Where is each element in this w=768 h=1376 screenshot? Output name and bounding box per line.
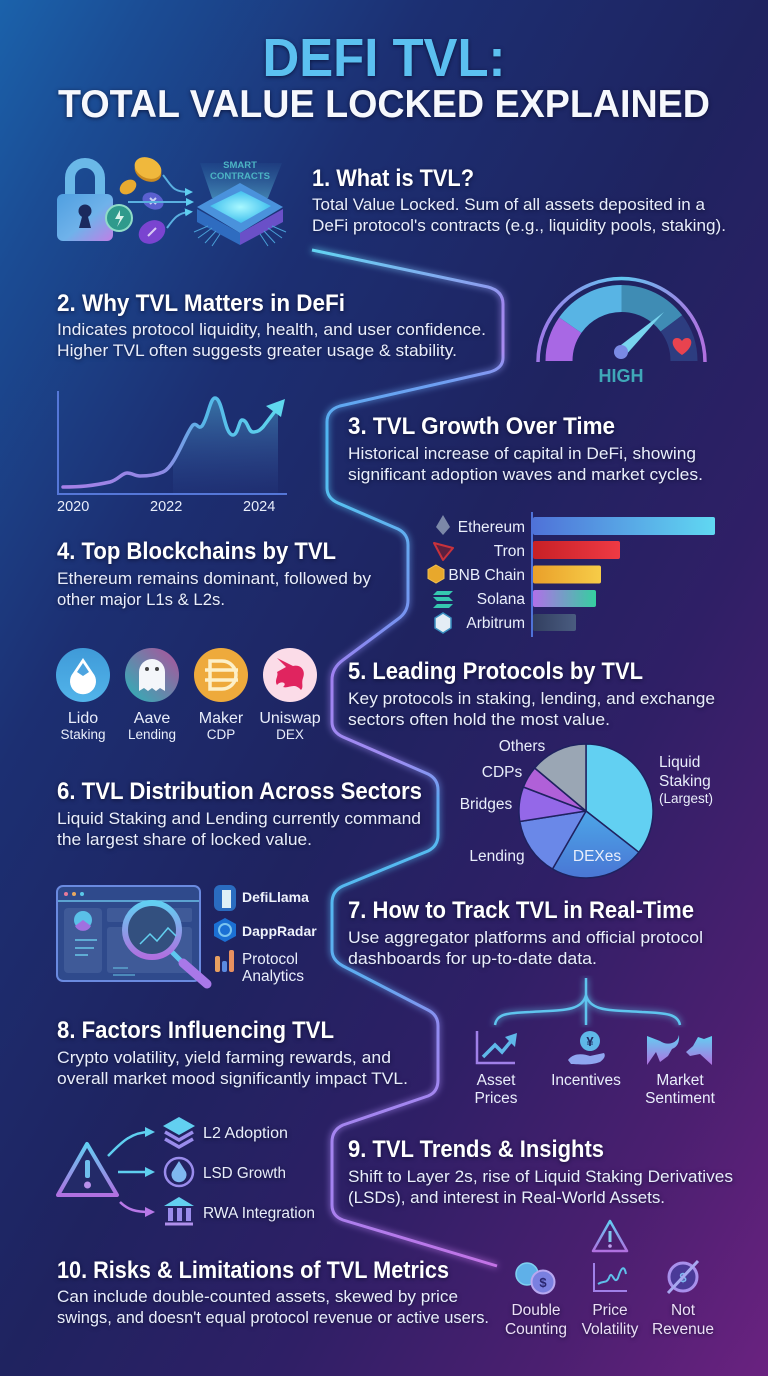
section 1 text: DeFi protocol's contracts (e.g., liquidity pools, staking). — [312, 217, 726, 235]
platform logos — [214, 885, 317, 985]
section 8 text: Crypto volatility, yield farming rewards, and — [57, 1049, 391, 1067]
pie labels: Others — [499, 738, 546, 755]
title: TOTAL VALUE LOCKED EXPLAINED — [58, 83, 710, 126]
bar labels: Tron — [494, 543, 525, 560]
icon: Lido — [56, 648, 110, 742]
icon: chip: CONTRACTS — [210, 171, 270, 182]
factor labels: Sentiment — [645, 1090, 716, 1107]
section 8 text — [57, 1017, 408, 1088]
section 10 text — [57, 1257, 489, 1327]
icon: Uniswap: Uniswap — [259, 710, 321, 727]
icon: price volatility — [594, 1263, 627, 1291]
Protocol Analytics logo — [215, 950, 304, 985]
icon: layers — [163, 1117, 195, 1147]
section 5 text: Key protocols in staking, lending, and exchange — [348, 690, 715, 708]
bar chart: top blockchains — [428, 512, 715, 637]
section 3 text: 3. TVL Growth Over Time — [348, 413, 615, 440]
factor labels: Prices — [474, 1090, 518, 1107]
pie label: liquid staking: (Largest) — [659, 791, 713, 806]
trend labels: L2 Adoption — [203, 1125, 288, 1142]
risk labels: Counting — [505, 1321, 567, 1338]
section 7 text: 7. How to Track TVL in Real-Time — [348, 897, 694, 924]
section 2 text: Higher TVL often suggests greater usage & stability. — [57, 342, 457, 360]
bar labels: Ethereum — [458, 519, 525, 536]
icon: dashboard with magnifier — [57, 886, 207, 984]
pie chart: sector distribution — [460, 738, 713, 878]
connector path — [312, 250, 503, 1266]
risk labels: Price — [592, 1302, 628, 1319]
section 10 text: swings, and doesn't equal protocol revenue or active users. — [57, 1309, 489, 1327]
icon: warning small — [593, 1221, 627, 1251]
section 3 text — [348, 413, 703, 484]
pie labels: DEXes — [573, 848, 621, 865]
icon: LSD drop — [165, 1158, 193, 1186]
icon: Lido: Staking — [60, 727, 106, 742]
trend labels: RWA Integration — [203, 1205, 315, 1222]
section 2 text: Indicates protocol liquidity, health, and user confidence. — [57, 321, 486, 339]
icon: chip — [194, 160, 286, 246]
section 4 text: Ethereum remains dominant, followed by — [57, 570, 372, 588]
section 5 text — [348, 658, 715, 729]
icon: Aave — [125, 648, 179, 742]
risk labels: Volatility — [582, 1321, 639, 1338]
line chart: TVL growth: 2024 — [243, 499, 275, 515]
section 6 text: 6. TVL Distribution Across Sectors — [57, 778, 422, 805]
bar labels — [448, 519, 525, 632]
risk labels: Revenue — [652, 1321, 714, 1338]
section 7 text — [348, 897, 703, 968]
section 3 text: significant adoption waves and market cycles. — [348, 466, 703, 484]
arrows — [108, 1132, 150, 1212]
section 8 text: 8. Factors Influencing TVL — [57, 1017, 334, 1044]
factor labels: Market — [656, 1072, 704, 1089]
icon: Aave: Aave — [134, 710, 170, 727]
icon: Maker: CDP — [207, 727, 235, 742]
DappRadar logo: DappRadar — [242, 923, 317, 939]
trend labels — [203, 1125, 315, 1222]
section 6 text — [57, 778, 422, 849]
pie label: liquid staking: Staking — [659, 773, 711, 790]
bar labels: BNB Chain — [448, 567, 525, 584]
bar labels: Arbitrum — [466, 615, 525, 632]
pie label: liquid staking: Liquid — [659, 754, 700, 771]
DefiLlama logo: DefiLlama — [242, 889, 309, 905]
icon: lock, coins and smart contract chip — [57, 153, 286, 249]
icon: gauge — [538, 279, 705, 386]
pie label: liquid staking — [659, 754, 713, 806]
icon: Aave: Lending — [128, 727, 176, 742]
pie labels — [460, 738, 621, 865]
icon: Uniswap — [259, 648, 321, 742]
section 9 text: 9. TVL Trends & Insights — [348, 1136, 604, 1163]
protocol logos row — [56, 648, 321, 742]
title — [58, 28, 710, 126]
icon: Lido: Lido — [68, 710, 98, 727]
icon: double coins — [516, 1263, 554, 1294]
factor labels: Asset — [477, 1072, 516, 1089]
icon: asset prices — [477, 1031, 517, 1063]
bars — [533, 517, 715, 631]
pie labels: CDPs — [482, 764, 522, 781]
arrows into chip — [128, 175, 190, 228]
section 10 text: 10. Risks & Limitations of TVL Metrics — [57, 1257, 449, 1284]
trends diagram — [58, 1117, 315, 1224]
Protocol Analytics logo: Analytics — [242, 968, 304, 985]
section 1 text: 1. What is TVL? — [312, 165, 474, 192]
pie labels: Bridges — [460, 796, 513, 813]
factors: asset prices, incentives, sentiment — [474, 1031, 716, 1107]
section 5 text: sectors often hold the most value. — [348, 711, 610, 729]
factor labels — [474, 1072, 716, 1107]
Protocol Analytics logo: Protocol — [242, 951, 298, 968]
trend labels: LSD Growth — [203, 1165, 286, 1182]
icon: chip: SMART — [223, 160, 257, 171]
icon: gauge: HIGH — [598, 366, 644, 386]
icon: Maker — [194, 648, 248, 742]
section 7 text: dashboards for up-to-date data. — [348, 950, 597, 968]
icon: padlock — [57, 163, 113, 241]
section 6 text: Liquid Staking and Lending currently command — [57, 810, 421, 828]
risk labels: Not — [671, 1302, 696, 1319]
section 7 text: Use aggregator platforms and official protocol — [348, 929, 703, 947]
icon: not revenue: $ — [679, 1270, 687, 1285]
icon: bull and bear — [647, 1035, 712, 1065]
icon: double coins: $ — [539, 1275, 547, 1290]
icon: Maker: Maker — [199, 710, 244, 727]
section 9 text: Shift to Layer 2s, rise of Liquid Staking Derivatives — [348, 1168, 733, 1186]
line chart: TVL growth: 2022 — [150, 499, 182, 515]
icon: incentives: ¥ — [586, 1034, 594, 1049]
factor labels: Incentives — [551, 1072, 621, 1089]
icon: warning triangle — [58, 1144, 117, 1195]
section 4 text: 4. Top Blockchains by TVL — [57, 538, 336, 565]
section 5 text: 5. Leading Protocols by TVL — [348, 658, 643, 685]
section 6 text: the largest share of locked value. — [57, 831, 312, 849]
title: DEFI TVL: — [262, 28, 506, 88]
section 9 text: (LSDs), and interest in Real-World Assets. — [348, 1189, 665, 1207]
section 2 text — [57, 290, 486, 360]
section 1 text: Total Value Locked. Sum of all assets deposited in a — [312, 196, 706, 214]
line chart: TVL growth: 2020 — [57, 499, 89, 515]
section 10 text: Can include double-counted assets, skewed by price — [57, 1288, 458, 1306]
icon: bank — [164, 1197, 194, 1224]
section 1 text — [312, 165, 726, 235]
chain icons — [428, 515, 453, 633]
icon: coins — [106, 153, 170, 249]
section 4 text — [57, 538, 372, 609]
section 9 text — [348, 1136, 733, 1207]
bar labels: Solana — [477, 591, 525, 608]
section 4 text: other major L1s & L2s. — [57, 591, 225, 609]
icon: not revenue — [668, 1261, 698, 1293]
risk labels: Double — [511, 1302, 561, 1319]
section 2 text: 2. Why TVL Matters in DeFi — [57, 290, 345, 317]
risk icons — [505, 1221, 714, 1338]
risk labels — [505, 1302, 714, 1338]
section 3 text: Historical increase of capital in DeFi, showing — [348, 445, 696, 463]
branching connector — [495, 978, 680, 1025]
icon: incentives — [568, 1031, 605, 1064]
pie labels: Lending — [469, 848, 525, 865]
icon: Uniswap: DEX — [276, 727, 304, 742]
line chart: TVL growth — [57, 391, 287, 515]
section 8 text: overall market mood significantly impact TVL. — [57, 1070, 408, 1088]
